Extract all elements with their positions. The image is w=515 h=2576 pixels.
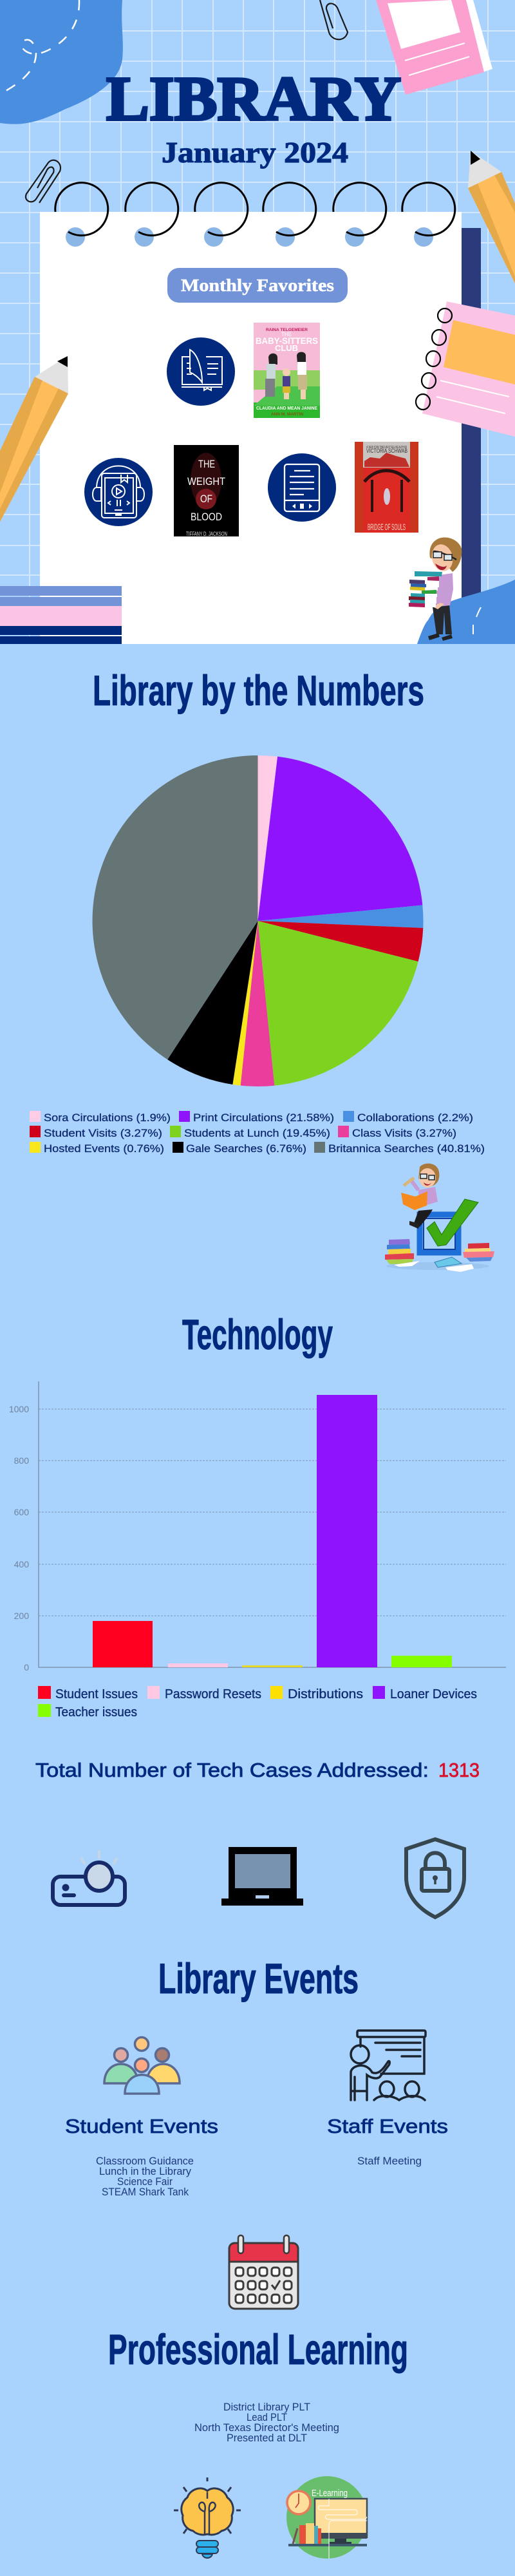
staff events heading: Staff Events <box>327 2115 448 2137</box>
icon: calendar <box>229 2235 298 2309</box>
bar chart <box>9 1381 506 1672</box>
paper clip top <box>320 0 348 39</box>
book cover: Bridge of Souls: #1 NEW YORK TIMES BESTSELLING AUTHOR <box>366 446 407 450</box>
book cover: The Weight of Blood: WEIGHT <box>187 475 225 488</box>
book cover: Baby-Sitters Club <box>254 323 320 418</box>
icon: students group <box>104 2038 180 2094</box>
icon: laptop <box>221 1847 303 1906</box>
icon: e-learning: E-Learning <box>312 2488 348 2499</box>
decorative blue blob top left <box>0 0 123 124</box>
pie legend: Britannica Searches (40.81%) <box>328 1142 485 1155</box>
book cover: Bridge of Souls: BRIDGE OF SOULS <box>368 522 406 532</box>
book cover: Baby-Sitters Club: ANN M. MARTIN <box>271 413 303 417</box>
pie legend: Sora Circulations (1.9%) <box>44 1112 171 1124</box>
icon: open book circle <box>167 337 235 406</box>
book cover: Baby-Sitters Club: CLAUDIA AND MEAN JANINE <box>256 405 317 411</box>
book cover: Bridge of Souls <box>355 442 418 533</box>
pie legend: Print Circulations (21.58%) <box>193 1112 334 1124</box>
paper clip left <box>26 160 61 203</box>
monthly favorites pill <box>167 268 348 303</box>
bitmoji: librarian with books <box>409 537 462 641</box>
book cover: Baby-Sitters Club: CLUB <box>275 343 298 353</box>
decorative blue blob bottom right <box>417 580 515 644</box>
student events heading: Student Events <box>65 2115 218 2137</box>
pie legend: Gale Searches (6.76%) <box>186 1142 306 1155</box>
student events list: STEAM Shark Tank <box>102 2186 189 2198</box>
axis labels: 200 <box>14 1611 29 1621</box>
book cover: The Weight of Blood <box>174 445 239 537</box>
book cover: The Weight of Blood: TIFFANY D. JACKSON <box>186 531 227 537</box>
pie legend: Hosted Events (0.76%) <box>44 1142 164 1155</box>
binder rings <box>55 183 455 236</box>
bar chart legend: Student Issues <box>55 1687 138 1701</box>
pencil left <box>0 356 68 522</box>
section heading: Technology: Technology <box>182 1311 333 1358</box>
student events list: Classroom Guidance <box>96 2155 194 2167</box>
book cover: Baby-Sitters Club: THE <box>281 331 292 337</box>
total tech cases: 1313 <box>438 1759 480 1781</box>
pie chart <box>93 755 424 1086</box>
binder holes <box>66 227 433 247</box>
bitmoji: librarian reading on checkbox <box>385 1164 494 1272</box>
pie legend: Class Visits (3.27%) <box>352 1127 456 1139</box>
professional learning list <box>194 2401 339 2444</box>
dark band behind notebook page <box>462 228 481 644</box>
axis labels: 800 <box>14 1455 29 1466</box>
book cover: Bridge of Souls: VICTORIA SCHWAB <box>366 448 407 454</box>
panel: notebook page <box>40 183 462 644</box>
pink notebook top right <box>376 0 492 95</box>
professional learning list: District Library PLT <box>223 2401 310 2413</box>
axis labels: 1000 <box>9 1404 29 1414</box>
professional learning list: North Texas Director's Meeting <box>194 2422 339 2434</box>
pie legend <box>30 1111 485 1155</box>
icon: staff presenter <box>351 2031 426 2100</box>
icon: e-learning <box>286 2476 368 2559</box>
section heading: Library Events: Library Events <box>158 1955 359 2002</box>
pie legend: Student Visits (3.27%) <box>44 1127 162 1139</box>
title: LIBRARY <box>106 64 401 134</box>
bar chart legend: Teacher issues <box>55 1705 137 1719</box>
axis labels: 0 <box>24 1662 29 1672</box>
axis labels <box>9 1404 29 1672</box>
monthly favorites pill: Monthly Favorites <box>181 276 334 295</box>
subtitle date: January 2024 <box>162 137 348 169</box>
bar chart legend: Loaner Devices <box>390 1687 477 1701</box>
book cover: Baby-Sitters Club: RAINA TELGEMEIER <box>266 328 308 332</box>
icon: e-reader circle <box>268 453 336 522</box>
pink notepad right <box>416 301 515 437</box>
axis labels: 600 <box>14 1507 29 1517</box>
book cover: The Weight of Blood: BLOOD <box>191 511 222 523</box>
pie legend: Collaborations (2.2%) <box>357 1112 473 1124</box>
pie legend: Students at Lunch (19.45%) <box>184 1127 330 1139</box>
book cover: The Weight of Blood: THE <box>198 458 215 470</box>
student events list <box>96 2155 194 2198</box>
stacked stripes bottom left <box>0 586 122 644</box>
icon: brain light bulb <box>174 2477 241 2558</box>
pencil right <box>468 151 515 283</box>
professional learning list: Lead PLT <box>247 2412 287 2423</box>
professional learning list: Presented at DLT <box>227 2432 307 2444</box>
student events list: Science Fair <box>117 2176 173 2188</box>
staff events list: Staff Meeting <box>357 2155 422 2167</box>
icon: audiobook circle <box>84 458 153 526</box>
bar chart legend: Password Resets <box>165 1687 261 1701</box>
book cover: Baby-Sitters Club: BABY-SITTERS <box>256 336 318 346</box>
book cover: The Weight of Blood: OF <box>200 493 212 505</box>
bar chart legend: Distributions <box>288 1687 363 1701</box>
icon: projector <box>53 1850 125 1905</box>
bar chart legend <box>38 1686 477 1719</box>
axis labels: 400 <box>14 1559 29 1569</box>
student events list: Lunch in the Library <box>99 2166 192 2177</box>
icon: shield lock <box>406 1839 464 1917</box>
total tech cases: Total Number of Tech Cases Addressed: <box>35 1759 429 1781</box>
